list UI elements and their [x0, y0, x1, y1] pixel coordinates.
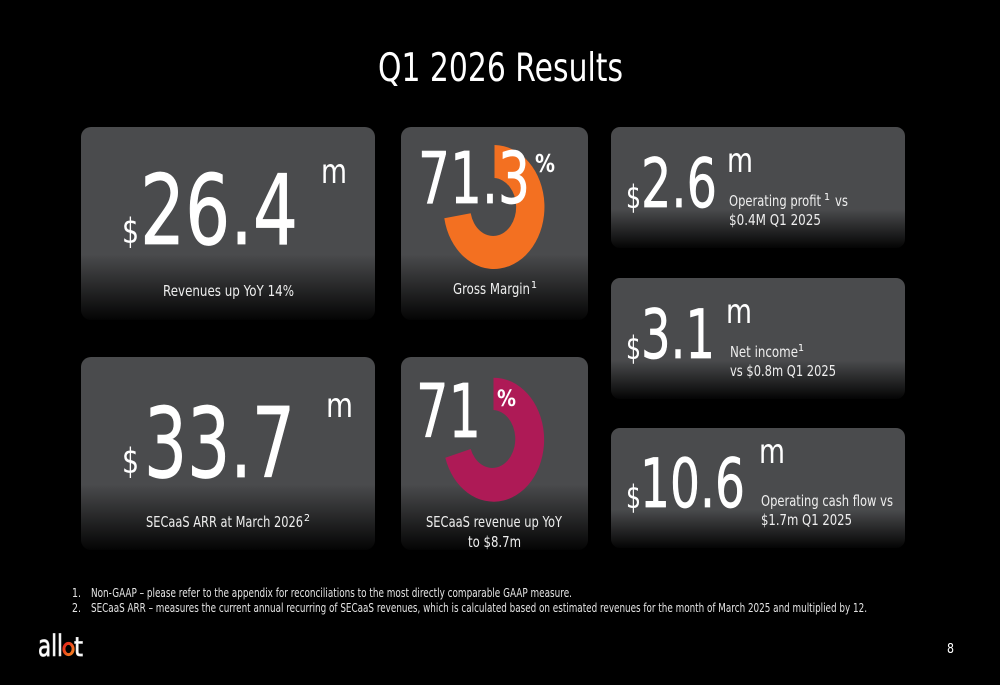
panel: SECaaS ARR: $ — [122, 442, 139, 482]
footnotes: 1. — [72, 586, 81, 600]
panel: operating cash flow: $1.7m Q1 2025 — [761, 511, 852, 529]
panel: net income: 3.1 — [641, 296, 715, 375]
panel: operating profit — [611, 127, 905, 248]
donut chart: gross margin — [444, 145, 544, 269]
panel: revenues — [81, 127, 375, 320]
panel: net income: vs $0.8m Q1 2025 — [730, 362, 836, 380]
panel: operating profit: $0.4M Q1 2025 — [729, 211, 821, 229]
panel: gross margin: 71.3 — [418, 137, 530, 220]
panel: net income: m — [726, 292, 752, 332]
panel: SECaaS revenue: to $8.7m — [468, 533, 521, 551]
panel: SECaaS revenue — [401, 357, 588, 551]
panel: SECaaS revenue: 71 — [416, 369, 481, 455]
panel: revenues: 26.4 — [140, 154, 298, 267]
panel: SECaaS ARR: SECaaS ARR at March 2026 — [146, 513, 303, 531]
panel: gross margin: 1 — [531, 280, 537, 291]
footnotes: 2. — [72, 601, 81, 615]
panel: gross margin — [401, 127, 588, 320]
footnotes — [72, 586, 867, 615]
panel: net income: Net income — [730, 343, 798, 361]
panel: SECaaS ARR: m — [326, 386, 353, 426]
panel: operating cash flow: 10.6 — [640, 445, 745, 524]
panel: net income: $ — [626, 329, 641, 367]
panel: SECaaS ARR: 2 — [304, 513, 310, 524]
panel: operating cash flow: $ — [626, 478, 641, 516]
panel: operating profit: Operating profit — [729, 192, 821, 210]
panel: operating cash flow: Operating cash flow vs — [761, 492, 893, 510]
panel: gross margin: Gross Margin — [453, 280, 530, 298]
panel: operating cash flow — [611, 428, 905, 548]
panel: gross margin: % — [535, 149, 555, 178]
panel: operating profit: m — [727, 141, 753, 181]
panel: SECaaS revenue: % — [497, 387, 516, 412]
donut chart: SECaaS revenue — [445, 378, 544, 502]
panel: operating cash flow: m — [759, 432, 785, 472]
panel: revenues: m — [321, 152, 347, 192]
panel: operating profit: vs — [835, 192, 848, 210]
page number: 8 — [947, 642, 954, 657]
panel: operating profit: 2.6 — [641, 145, 717, 224]
panel: net income: 1 — [798, 343, 804, 354]
panel: revenues: $ — [122, 212, 139, 252]
panel: SECaaS ARR — [81, 357, 375, 550]
panel: SECaaS ARR: 33.7 — [144, 387, 295, 500]
logo: allot: t — [74, 632, 83, 663]
logo: allot: all — [38, 629, 63, 663]
panel: revenues: Revenues up YoY 14% — [163, 282, 294, 300]
panel: operating profit: 1 — [824, 192, 830, 203]
panel: operating profit: $ — [626, 178, 641, 216]
panel: SECaaS revenue: SECaaS revenue up YoY — [426, 513, 562, 531]
footnotes: Non-GAAP – please refer to the appendix for reconciliations to the most directly comparable GAAP measure. — [91, 586, 572, 600]
title: Q1 2026 Results — [378, 46, 623, 91]
panel: net income — [611, 278, 905, 399]
